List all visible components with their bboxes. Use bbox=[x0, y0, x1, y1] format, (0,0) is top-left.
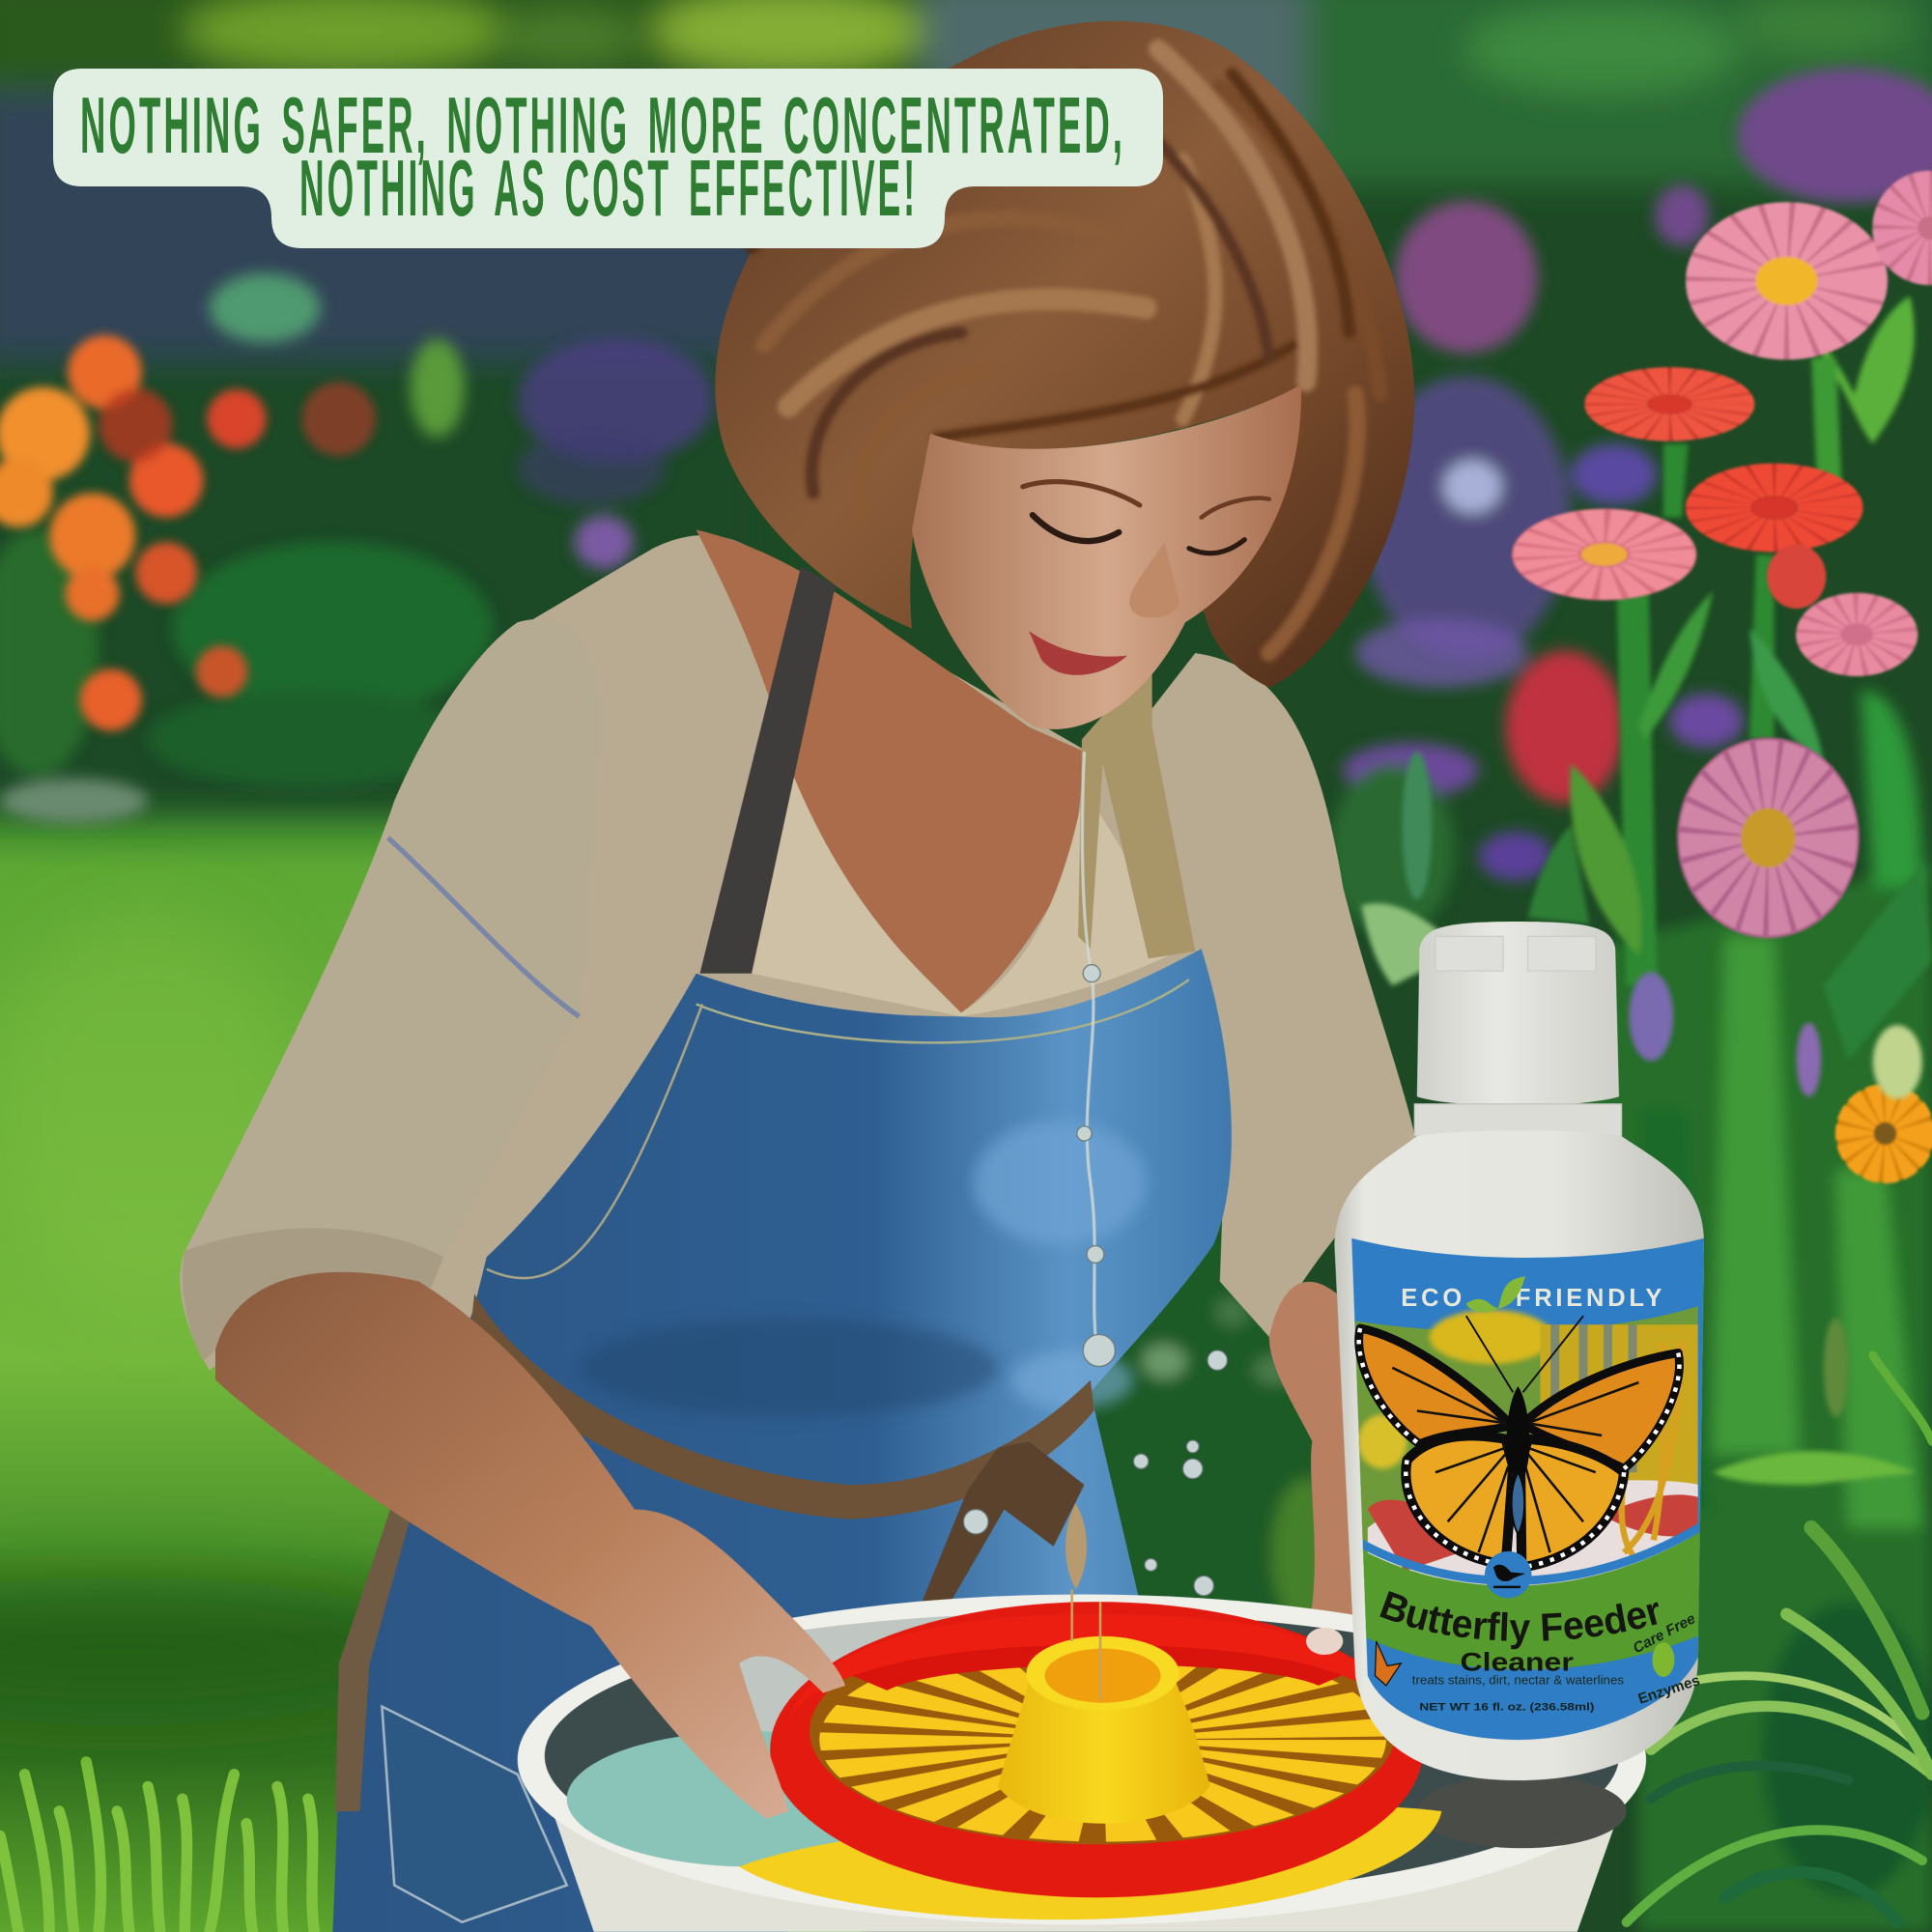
foreground leaves bbox=[0, 1355, 1932, 1932]
mid green foliage right bbox=[1084, 690, 1932, 1932]
left arm and hand bbox=[215, 1272, 845, 1819]
feeder yellow cone bbox=[998, 1589, 1210, 1824]
neck and chest bbox=[696, 529, 1084, 1012]
small butterfly icon bbox=[1375, 1641, 1401, 1686]
care free enzymes mark bbox=[1631, 1610, 1702, 1708]
bird badge bbox=[1485, 1551, 1531, 1598]
stems and leaves right bbox=[1361, 296, 1932, 1485]
woman figure bbox=[180, 21, 1417, 1932]
lawn bbox=[0, 788, 863, 1932]
label green band bbox=[1355, 1528, 1707, 1669]
net weight: NET WT 16 fl. oz. (236.58ml) bbox=[1419, 1701, 1595, 1713]
torso and shirt bbox=[370, 535, 1417, 1337]
product bottle bbox=[1267, 922, 1704, 1820]
water stream and droplets bbox=[963, 752, 1227, 1596]
feeder red ring bbox=[770, 1602, 1423, 1897]
butterfly feeder bbox=[739, 1589, 1441, 1919]
bottle label bbox=[1337, 1233, 1707, 1749]
right arm and hand bbox=[1269, 1282, 1355, 1653]
headline text: NOTHING AS COST EFFECTIVE! bbox=[299, 143, 918, 233]
right thumb bbox=[1306, 1628, 1343, 1655]
care free enzymes mark: Enzymes bbox=[1636, 1672, 1702, 1708]
headline callout bbox=[53, 69, 1163, 248]
butterfly illustration bbox=[1359, 1316, 1679, 1567]
product tagline: treats stains, dirt, nectar & waterlines bbox=[1412, 1673, 1624, 1688]
label photo bbox=[1355, 1306, 1698, 1589]
purple blooms right bbox=[1331, 68, 1932, 936]
bottle cap bbox=[1417, 922, 1619, 1106]
label text: eco friendly: ECO bbox=[1401, 1285, 1465, 1312]
product title: Butterfly Feeder bbox=[1379, 1591, 1659, 1650]
hair bbox=[715, 21, 1414, 688]
label text: eco friendly bbox=[1401, 1276, 1665, 1312]
orange flowers left bbox=[0, 335, 376, 730]
product title: Cleaner bbox=[1460, 1648, 1575, 1677]
bottle body bbox=[1334, 1130, 1704, 1780]
face bbox=[912, 384, 1301, 729]
shrubs left bbox=[0, 273, 715, 823]
left sleeve bbox=[180, 619, 600, 1370]
headline text bbox=[80, 80, 1125, 233]
fence and back hedge bbox=[0, 0, 1932, 813]
feeder red slats bbox=[838, 1642, 1355, 1690]
care free enzymes mark: Care Free bbox=[1631, 1610, 1699, 1657]
feeder yellow rays bbox=[924, 1675, 1282, 1804]
feeder lower yellow base bbox=[739, 1805, 1441, 1919]
apron belt bbox=[469, 1293, 1094, 1633]
lawn highlights bbox=[0, 927, 369, 1768]
label text: eco friendly: FRIENDLY bbox=[1516, 1285, 1665, 1312]
product title bbox=[1379, 1591, 1659, 1677]
apron pocket bbox=[382, 1707, 567, 1922]
flowers right bbox=[1512, 171, 1932, 1182]
apron bbox=[332, 949, 1232, 1932]
bucket bbox=[518, 1595, 1646, 1932]
apron straps bbox=[699, 567, 836, 974]
